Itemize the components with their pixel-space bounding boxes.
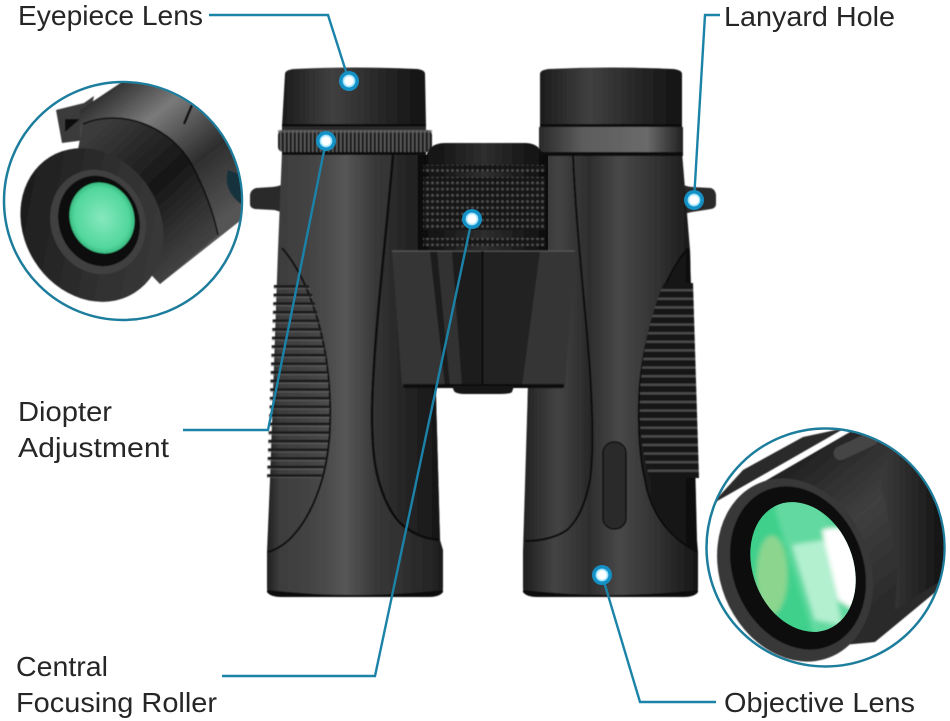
barrel <box>765 432 938 646</box>
right metal band <box>539 127 683 152</box>
left lug <box>250 177 293 222</box>
marker: lanyard hole <box>684 190 704 210</box>
label: diopter adjustment: Diopter <box>18 396 112 427</box>
leader: objective lens <box>602 575 716 702</box>
left grip ribs <box>266 283 334 478</box>
binoculars product photo <box>250 68 716 597</box>
left eyepiece cap <box>282 68 426 126</box>
marker dots <box>316 71 704 585</box>
label: diopter adjustment: Adjustment <box>18 432 169 463</box>
label: central focusing roller <box>16 651 217 718</box>
leader lines <box>183 15 720 702</box>
marker: diopter <box>316 131 336 151</box>
marker: eyepiece lens <box>339 71 359 91</box>
right eyepiece cap <box>540 68 682 125</box>
outer barrel <box>80 80 250 284</box>
bridge <box>392 251 575 394</box>
inset: objective lens closeup <box>705 427 946 668</box>
strap lug <box>56 96 94 143</box>
leader: central focusing roller <box>222 219 472 676</box>
label: objective lens: Objective Lens <box>724 687 915 718</box>
leader: diopter adjustment <box>183 141 326 430</box>
leader: lanyard hole <box>694 15 720 200</box>
label: diopter adjustment <box>18 396 169 463</box>
marker: objective lens <box>592 565 612 585</box>
label: eyepiece lens: Eyepiece Lens <box>18 0 203 31</box>
right lug <box>670 175 716 222</box>
inset: eyepiece closeup <box>0 80 250 329</box>
eyecup <box>20 148 164 303</box>
front ring <box>716 478 872 662</box>
right barrel <box>523 68 716 597</box>
focusing wheel <box>422 143 546 250</box>
leader: eyepiece lens <box>209 15 349 81</box>
inner barrel <box>70 118 218 284</box>
label: central focusing roller: Central <box>16 651 108 682</box>
label: central focusing roller: Focusing Roller <box>16 687 217 718</box>
right grip ribs <box>636 283 700 478</box>
belly slot <box>603 442 626 529</box>
label: lanyard hole: Lanyard Hole <box>724 1 895 32</box>
centre gap shadow <box>418 155 548 255</box>
marker: focusing roller <box>462 209 482 229</box>
front strap <box>716 430 842 502</box>
diopter ring <box>278 130 432 152</box>
left barrel <box>250 68 443 597</box>
lens <box>750 502 856 632</box>
